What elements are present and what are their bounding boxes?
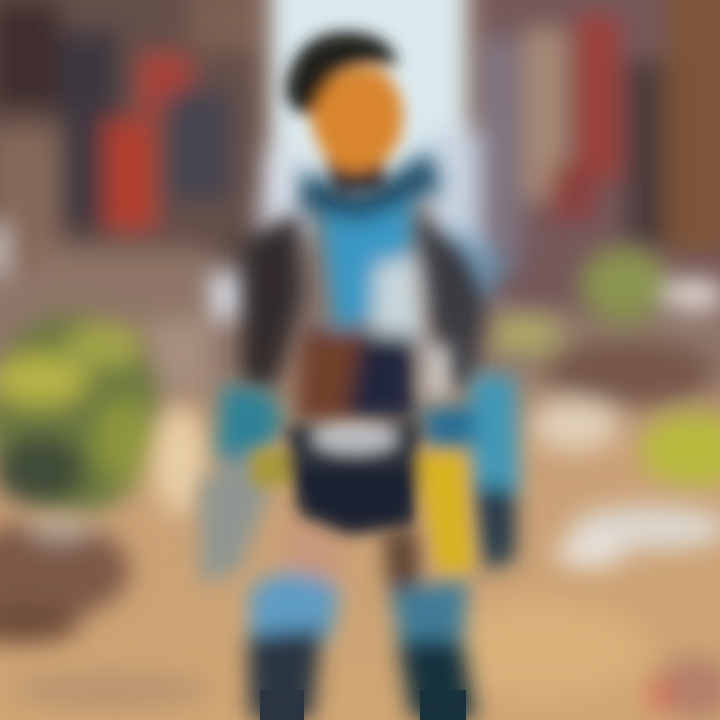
character: legs	[248, 520, 476, 720]
character: arms	[240, 212, 515, 390]
background: left rocks and sandy ground	[0, 405, 720, 720]
character: torso	[295, 150, 450, 420]
character: belt and shorts	[252, 420, 472, 570]
background: left buildings	[0, 0, 260, 390]
character: neck and head	[285, 32, 403, 195]
background: left green bushes	[0, 315, 160, 515]
background: sky	[190, 0, 510, 320]
character: boot bases at the frame edge	[260, 690, 466, 720]
background: right foliage and rocks	[487, 247, 720, 568]
character	[200, 32, 520, 720]
background: right buildings	[480, 0, 720, 310]
character: gauntlets	[200, 375, 520, 585]
